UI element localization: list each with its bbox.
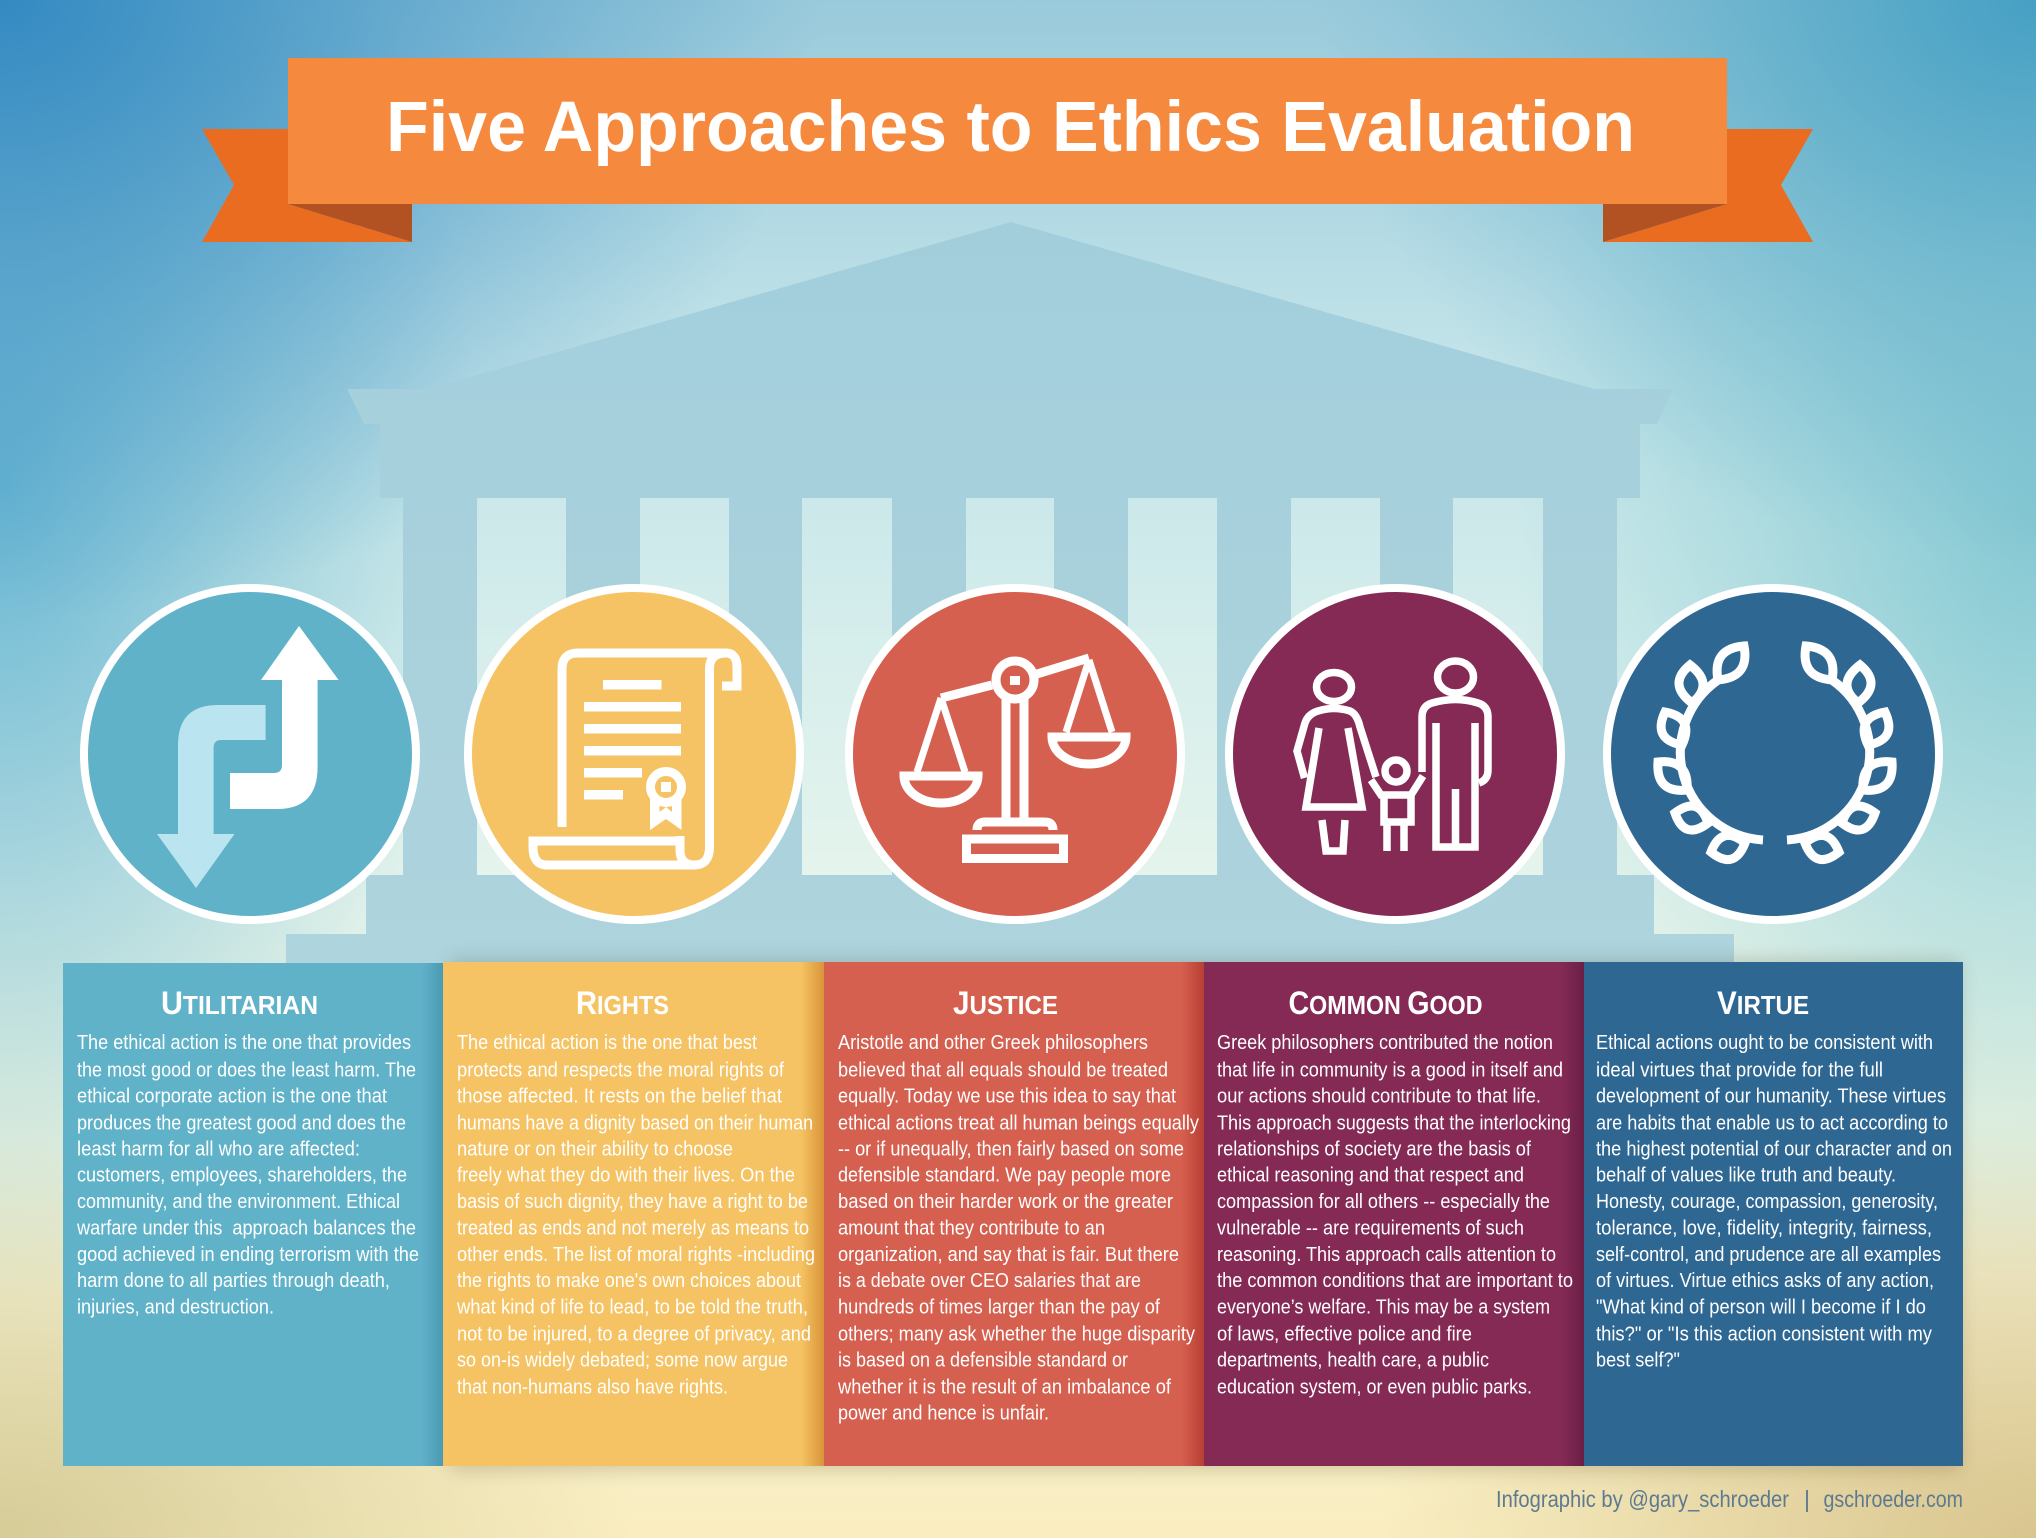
left ribbon fold: [288, 204, 412, 242]
text block: utilitarian: harm done to all parties through death,: [77, 1269, 390, 1292]
circle icon: common good family: [1229, 588, 1561, 920]
heading: virtue: VIRTUE: [1717, 985, 1809, 1021]
panel: justice: [824, 962, 1204, 1466]
heading: justice: JUSTICE: [953, 985, 1058, 1021]
text block: rights: other ends. The list of moral rights -including: [457, 1243, 815, 1266]
text block: common good: relationships of society are the basis of: [1217, 1137, 1531, 1160]
text block: virtue: the highest potential of our character and on: [1596, 1137, 1952, 1160]
text block: rights: freely what they do with their lives. On the: [457, 1163, 795, 1186]
text block: utilitarian: warfare under this approach balances the: [76, 1216, 416, 1239]
footer credit: |: [1804, 1486, 1810, 1512]
text block: rights: humans have a dignity based on their human: [457, 1111, 813, 1134]
text block: virtue: this?" or "Is this action consistent with my: [1596, 1322, 1933, 1345]
footer credit: Infographic by @gary_schroeder: [1496, 1486, 1789, 1512]
text block: common good: compassion for all others -- especially the: [1217, 1190, 1550, 1213]
text block: utilitarian: injuries, and destruction.: [77, 1295, 274, 1318]
text block: rights: that non-humans also have rights.: [457, 1375, 728, 1398]
text block: rights: The ethical action is the one that best: [457, 1031, 757, 1054]
text block: rights: treated as ends and not merely as means to: [457, 1216, 809, 1239]
text block: virtue: ideal virtues that provide for the full: [1596, 1058, 1883, 1081]
panel: common good: [1204, 962, 1584, 1466]
panel: virtue: [1584, 962, 1963, 1466]
soft shadow behind panels: [450, 960, 1960, 1470]
text block: virtue: behalf of values like truth and beauty.: [1596, 1163, 1896, 1186]
footer credit: gschroeder.com: [1824, 1486, 1963, 1512]
text block: justice: is based on a defensible standard or: [838, 1349, 1128, 1372]
heading: common good: COMMON GOOD: [1288, 985, 1482, 1021]
text block: rights: not to be injured, to a degree of privacy, and: [457, 1322, 811, 1345]
text block: rights: protects and respects the moral rights of: [457, 1058, 784, 1081]
panel: rights: [443, 962, 824, 1466]
text block: utilitarian: the most good or does the least harm. The: [77, 1058, 416, 1081]
icon: man: [1422, 661, 1488, 847]
text block: justice: equally. Today we use this idea to say that: [838, 1084, 1176, 1107]
text block: virtue: best self?": [1596, 1349, 1680, 1372]
text block: utilitarian: The ethical action is the one that provides: [77, 1031, 411, 1054]
text block: virtue: Honesty, courage, compassion, generosity,: [1596, 1190, 1938, 1213]
text block: justice: Aristotle and other Greek philosophers: [838, 1031, 1148, 1054]
text block: virtue: development of our humanity. These virtues: [1596, 1084, 1946, 1107]
text block: rights: those affected. It rests on the belief that: [457, 1084, 782, 1107]
text block: common good: that life in community is a good in itself and: [1217, 1058, 1563, 1081]
text block: virtue: tolerance, love, fidelity, integrity, fairness,: [1596, 1216, 1932, 1239]
text block: rights: the rights to make one's own choices about: [457, 1269, 801, 1292]
circle icon: justice scales: [849, 588, 1181, 920]
text block: rights: [456, 1031, 815, 1398]
text block: utilitarian: customers, employees, shareholders, the: [77, 1163, 407, 1186]
text block: virtue: [1596, 1031, 1952, 1372]
banner band: [288, 58, 1727, 204]
circle icon: utilitarian arrows: [84, 588, 416, 920]
text block: utilitarian: [76, 1031, 419, 1318]
circle icon: virtue laurel wreath: [1607, 588, 1939, 920]
title: Five Approaches to Ethics Evaluation: [386, 88, 1635, 167]
text block: utilitarian: good achieved in ending terrorism with the: [77, 1243, 419, 1266]
text block: virtue: self-control, and prudence are all examples: [1596, 1243, 1941, 1266]
text block: virtue: Ethical actions ought to be consistent with: [1596, 1031, 1933, 1054]
icon: seal: [650, 772, 682, 830]
text block: common good: Greek philosophers contributed the notion: [1217, 1031, 1553, 1054]
text block: virtue: are habits that enable us to act according to: [1596, 1111, 1948, 1134]
text block: justice: ethical actions treat all human beings equally: [838, 1111, 1200, 1134]
text block: rights: what kind of life to lead, to be told the truth,: [456, 1295, 808, 1318]
text block: common good: the common conditions that are important to: [1217, 1269, 1573, 1292]
text block: virtue: of virtues. Virtue ethics asks of any action,: [1596, 1269, 1934, 1292]
title banner: [202, 58, 1813, 242]
text block: common good: [1217, 1031, 1573, 1398]
text block: utilitarian: produces the greatest good and does the: [77, 1111, 406, 1134]
text block: common good: reasoning. This approach calls attention to: [1217, 1243, 1556, 1266]
text block: rights: basis of such dignity, they have a right to be: [457, 1190, 808, 1213]
heading: rights: RIGHTS: [576, 985, 669, 1021]
text block: rights: so on-is widely debated; some now argue: [457, 1349, 788, 1372]
text block: common good: departments, health care, a public: [1217, 1349, 1489, 1372]
text block: common good: ethical reasoning and that respect and: [1217, 1163, 1524, 1186]
right ribbon fold: [1603, 204, 1727, 242]
text block: common good: education system, or even public parks.: [1217, 1375, 1532, 1398]
text block: justice: amount that they contribute to an: [838, 1216, 1105, 1239]
temple silhouette: [286, 222, 1734, 970]
icon: light down arrow: [157, 705, 266, 888]
heading: utilitarian: UTILITARIAN: [161, 985, 318, 1021]
icon: white up arrow: [230, 626, 339, 809]
text block: justice: defensible standard. We pay people more: [838, 1163, 1171, 1186]
text block: justice: believed that all equals should be treated: [838, 1058, 1168, 1081]
icon: right laurel branch: [1787, 646, 1892, 860]
text block: rights: nature or on their ability to choose: [457, 1137, 733, 1160]
text block: justice: others; many ask whether the huge disparity: [838, 1322, 1196, 1345]
text block: common good: vulnerable -- are requirements of such: [1217, 1216, 1524, 1239]
text block: justice: based on their harder work or the greater: [838, 1190, 1173, 1213]
text block: utilitarian: community, and the environment. Ethical: [77, 1190, 400, 1213]
left ribbon tail: [202, 129, 412, 242]
icon: child: [1371, 760, 1423, 851]
right ribbon tail: [1603, 129, 1813, 242]
text block: justice: hundreds of times larger than the pay of: [838, 1295, 1160, 1318]
text block: common good: our actions should contribute to that life.: [1217, 1084, 1541, 1107]
text block: justice: organization, and say that is fair. But there: [838, 1243, 1179, 1266]
text block: justice: power and hence is unfair.: [838, 1402, 1049, 1425]
text block: utilitarian: least harm for all who are affected:: [77, 1137, 360, 1160]
panel: utilitarian: [63, 963, 443, 1466]
text block: common good: of laws, effective police and fire: [1217, 1322, 1472, 1345]
icon: left laurel branch: [1658, 646, 1763, 860]
text block: justice: -- or if unequally, then fairly based on some: [838, 1137, 1184, 1160]
text block: justice: [837, 1031, 1200, 1425]
text block: virtue: "What kind of person will I become if I do: [1596, 1295, 1926, 1318]
text block: justice: is a debate over CEO salaries that are: [838, 1269, 1141, 1292]
text block: justice: whether it is the result of an imbalance of: [837, 1375, 1171, 1398]
text block: utilitarian: ethical corporate action is the one that: [77, 1084, 387, 1107]
circle icon: rights scroll: [468, 588, 800, 920]
text block: common good: This approach suggests that the interlocking: [1217, 1111, 1571, 1134]
text block: common good: everyone’s welfare. This may be a system: [1217, 1295, 1550, 1318]
icon: woman: [1297, 672, 1376, 851]
